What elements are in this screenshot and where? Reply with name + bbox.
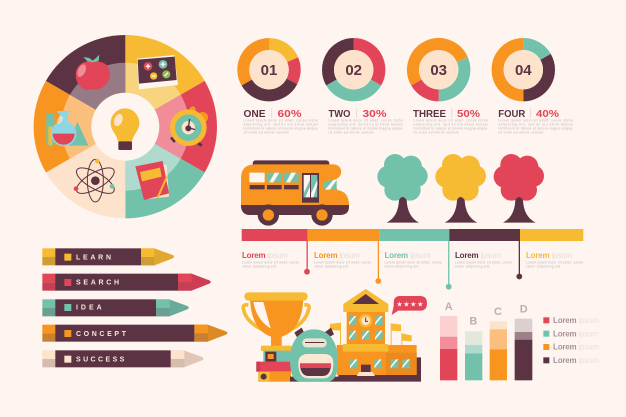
timeline label: red: Lorem ipsum <box>242 251 288 260</box>
panel: donut 02: 30% <box>362 109 387 120</box>
panel: donut 01: Lorem ipsum dolor sit amet, conse ctetur <box>244 118 319 122</box>
panel: donut 04: FOUR <box>498 109 525 120</box>
icon: apple <box>76 55 110 90</box>
panel: donut 01: incididunt ut labore et dolore magna aliqua. <box>244 127 319 131</box>
pencil: search <box>42 274 211 291</box>
panel: donut 01 <box>243 44 319 135</box>
pencil: learn: LEARN <box>76 255 111 262</box>
timeline label: dark: ctetur adipiscing elit. <box>455 264 490 268</box>
callout: star rating: ★★★★ <box>396 300 424 308</box>
panel: donut 01: ONE <box>244 109 266 120</box>
pencil: success: SUCCESS <box>76 356 125 363</box>
panel: donut 04 <box>498 44 574 135</box>
timeline label: dark: Lorem ipsum dolor sit amet, conse <box>455 260 512 264</box>
chart legend: Lorem ipsum <box>553 316 599 325</box>
panel: donut 04: 04 <box>515 62 532 79</box>
bar A: A <box>445 301 453 313</box>
timeline label: yellow: Lorem ipsum dolor sit amet, conse <box>526 260 583 264</box>
icon: trophy <box>243 292 309 351</box>
bar C <box>490 306 507 380</box>
bar B: B <box>469 315 477 327</box>
timeline label: yellow: Lorem ipsum <box>526 251 572 260</box>
pencil: idea <box>42 299 189 316</box>
callout: star rating <box>392 296 427 315</box>
timeline label: dark <box>455 251 512 268</box>
timeline label: yellow: ctetur adipiscing elit. <box>526 264 561 268</box>
timeline label: red <box>242 251 299 268</box>
panel: donut 02: TWO <box>328 109 351 120</box>
pencil: concept <box>42 325 227 342</box>
icon: stacked books <box>256 351 291 382</box>
icon: atom <box>73 159 118 202</box>
timeline marker: teal <box>446 241 452 290</box>
illustration: bus and trees <box>241 154 544 226</box>
icon: notebook <box>135 161 169 200</box>
bar B <box>465 315 482 380</box>
panel: donut 04: Ut enim ad minim veniam <box>498 131 544 135</box>
timeline marker: dark <box>516 241 522 279</box>
panel: donut 01: adipiscing elit, sed do eiu smod tempor <box>244 122 319 126</box>
illustration: trophy, backpack and school <box>243 289 427 382</box>
panel: pencil list <box>42 248 227 367</box>
panel: donut 03: THREE <box>413 109 446 120</box>
timeline label: orange: ctetur adipiscing elit. <box>314 264 349 268</box>
timeline label: dark: Lorem ipsum <box>455 251 501 260</box>
icon: teal tree <box>377 154 428 223</box>
timeline label: red: Lorem ipsum dolor sit amet, conse <box>242 260 299 264</box>
icon: red tree <box>494 154 544 223</box>
icon: school bus <box>241 160 349 226</box>
panel: donut 03: incididunt ut labore et dolore magna aliqua. <box>414 127 489 131</box>
icon: backpack <box>290 328 338 382</box>
panel: donut 04: Lorem ipsum dolor sit amet, conse ctetur <box>498 118 574 122</box>
timeline label: orange: Lorem ipsum <box>314 251 360 260</box>
bar C: C <box>494 306 502 318</box>
timeline label: red: ctetur adipiscing elit. <box>242 264 277 268</box>
chart legend: Lorem ipsum <box>553 329 599 338</box>
timeline label: yellow <box>526 251 583 268</box>
panel: donut 01: 60% <box>278 109 302 120</box>
panel: donut 03 <box>413 44 489 135</box>
panel: donut 02 <box>328 44 404 135</box>
panel: donut 03: 50% <box>457 109 480 120</box>
timeline label: teal: Lorem ipsum <box>384 251 431 260</box>
icon: school building <box>285 289 421 382</box>
pencil: idea: IDEA <box>76 305 102 312</box>
bar chart <box>440 301 599 380</box>
panel: donut 04: adipiscing elit, sed do eiu smod tempor <box>498 122 574 126</box>
panel: donut 03: adipiscing elit, sed do eiu smod tempor <box>414 122 489 126</box>
chart legend <box>543 316 599 365</box>
chart legend: Lorem ipsum <box>553 356 599 365</box>
panel: donut 01: Ut enim ad minim veniam <box>244 131 289 135</box>
panel: segmented wheel <box>34 35 217 218</box>
panel: donut 03: Ut enim ad minim veniam <box>414 131 459 135</box>
panel: donut 02: adipiscing elit, sed do eiu smod tempor <box>328 122 404 126</box>
timeline label: teal: ctetur adipiscing elit. <box>384 264 420 268</box>
icon: light bulb <box>111 108 139 150</box>
panel: donut 02: Ut enim ad minim veniam <box>328 131 374 135</box>
icon: alarm clock <box>170 106 208 147</box>
icon: yellow tree <box>435 154 486 223</box>
panel: donut 03: Lorem ipsum dolor sit amet, conse ctetur <box>414 118 489 122</box>
bar A <box>440 301 457 380</box>
timeline label: orange: Lorem ipsum dolor sit amet, conse <box>314 260 371 264</box>
timeline label: orange <box>314 251 371 268</box>
panel: donut 04: incididunt ut labore et dolore magna aliqua. <box>498 127 573 131</box>
bar D: D <box>520 303 528 315</box>
panel: donut 02: Lorem ipsum dolor sit amet, conse ctetur <box>328 118 404 122</box>
panel: donut 04: 40% <box>536 109 559 120</box>
panel: donut 02: 02 <box>345 62 362 79</box>
timeline label: teal: Lorem ipsum dolor sit amet, conse <box>384 260 442 264</box>
timeline <box>242 229 583 290</box>
icon: blackboard <box>137 55 178 89</box>
panel: donut 02: incididunt ut labore et dolore magna aliqua. <box>328 127 404 131</box>
panel: donut 03: 03 <box>430 62 447 79</box>
chart legend: Lorem ipsum <box>553 343 599 352</box>
icon: lab flasks <box>46 111 88 147</box>
pencil: success <box>42 350 203 367</box>
bar D <box>515 303 532 380</box>
panel: donut 01: 01 <box>261 62 277 79</box>
pencil: learn <box>42 248 174 265</box>
pencil: concept: CONCEPT <box>76 331 127 338</box>
timeline label: teal <box>384 251 442 268</box>
pencil: search: SEARCH <box>76 280 119 287</box>
timeline marker: orange <box>375 241 381 284</box>
timeline marker: red <box>304 241 310 275</box>
